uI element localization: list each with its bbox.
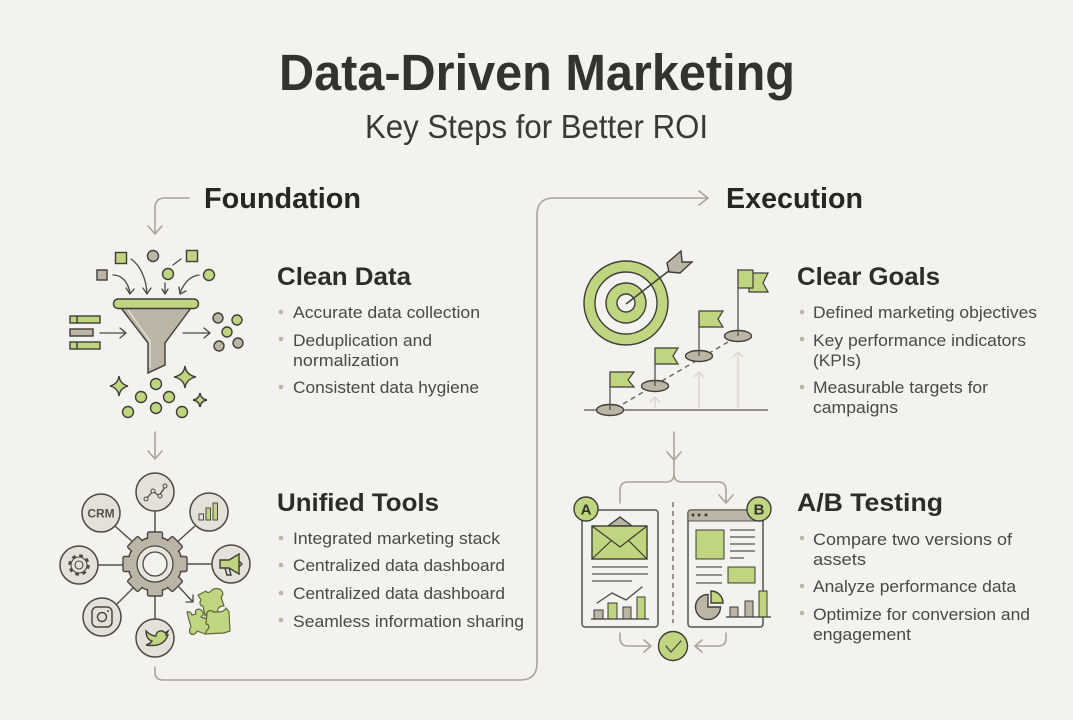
text: clear goals: Clear Goals bbox=[797, 263, 940, 291]
arrow: clean data to unified tools bbox=[148, 432, 162, 459]
text: clean data: Consistent data hygiene bbox=[293, 378, 479, 397]
text: a/b testing: A/B Testing bbox=[797, 489, 943, 517]
text: clear goals: Defined marketing objectives bbox=[813, 303, 1037, 322]
text: a/b testing: engagement bbox=[813, 625, 911, 644]
text: clean data: normalization bbox=[293, 351, 399, 370]
target bbox=[584, 251, 692, 345]
text: a/b testing bbox=[797, 489, 1030, 644]
text: unified tools: Unified Tools bbox=[277, 489, 439, 517]
satellite: twitter bbox=[136, 619, 174, 657]
text: clean data: Accurate data collection bbox=[293, 303, 480, 322]
subtitle: Key Steps for Better ROI bbox=[365, 108, 708, 145]
icon: A/B test bbox=[574, 497, 771, 660]
arrow to puzzle bbox=[179, 587, 193, 602]
gear bbox=[123, 532, 187, 596]
text: unified tools bbox=[277, 489, 524, 631]
text: clean data: Clean Data bbox=[277, 263, 412, 291]
icon: target and flags bbox=[584, 251, 768, 416]
heading: execution: Execution bbox=[726, 183, 863, 215]
badge B bbox=[747, 497, 771, 521]
text: clear goals: Key performance indicators bbox=[813, 331, 1026, 350]
title: Data-Driven Marketing bbox=[279, 44, 795, 101]
result check bbox=[658, 632, 688, 660]
badge A bbox=[574, 497, 598, 521]
flags bbox=[596, 269, 768, 416]
icon: data funnel bbox=[70, 250, 243, 418]
variant A card bbox=[582, 510, 658, 627]
text: clean data: Deduplication and bbox=[293, 331, 432, 350]
arrow: foundation to execution connector bbox=[155, 191, 708, 680]
satellite: megaphone bbox=[212, 545, 250, 583]
variant B card bbox=[688, 510, 771, 627]
text: a/b testing: Analyze performance data bbox=[813, 577, 1017, 596]
text: a/b testing: Compare two versions of bbox=[813, 530, 1012, 549]
text: unified tools: Integrated marketing stack bbox=[293, 529, 501, 548]
text: unified tools: Seamless information sharing bbox=[293, 612, 524, 631]
text: unified tools: Centralized data dashboard bbox=[293, 584, 505, 603]
text: clear goals: Measurable targets for bbox=[813, 378, 988, 397]
icon: tools hub bbox=[60, 473, 250, 657]
text: clear goals: (KPIs) bbox=[813, 351, 861, 370]
satellite: bar chart bbox=[190, 493, 228, 531]
satellite: instagram bbox=[83, 598, 121, 636]
text: a/b testing: Optimize for conversion and bbox=[813, 605, 1030, 624]
satellite: settings bbox=[60, 546, 98, 584]
puzzle pieces bbox=[187, 589, 230, 634]
badge B: B bbox=[754, 502, 765, 518]
arrow: goals to testing bracket bbox=[620, 432, 733, 503]
text: clear goals: campaigns bbox=[813, 398, 898, 417]
text: clean data bbox=[277, 263, 480, 397]
heading: foundation: Foundation bbox=[204, 183, 361, 215]
text: unified tools: Centralized data dashboard bbox=[293, 556, 505, 575]
light rising arrows bbox=[650, 352, 743, 408]
satellite: CRM bbox=[82, 494, 120, 532]
satellite: CRM: CRM bbox=[87, 506, 115, 520]
satellite: analytics line bbox=[136, 473, 174, 511]
text: a/b testing: assets bbox=[813, 550, 866, 569]
arrow: into foundation bbox=[148, 198, 189, 234]
badge A: A bbox=[581, 502, 592, 518]
result arrows bbox=[620, 633, 726, 652]
text: clear goals bbox=[797, 263, 1037, 417]
